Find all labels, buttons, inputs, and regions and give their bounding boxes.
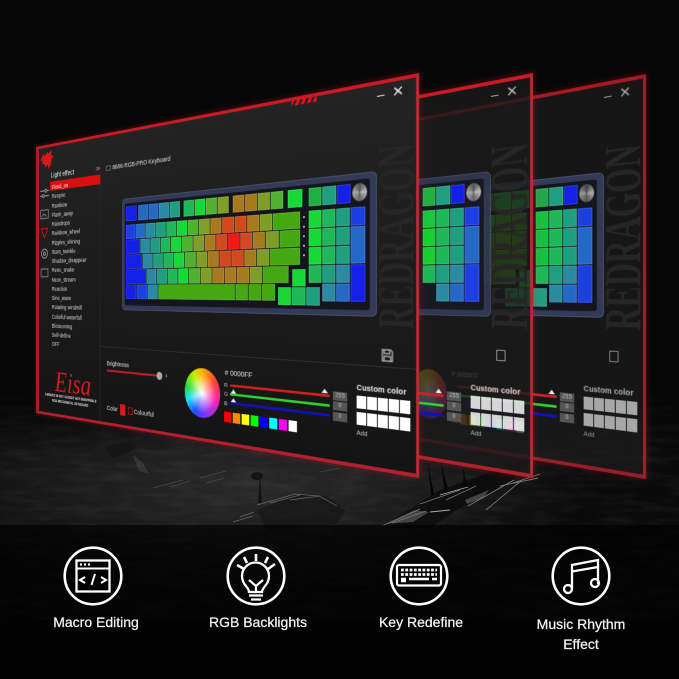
window controls: – ✕ bbox=[377, 83, 404, 103]
watermark: REDRAGON bbox=[367, 140, 426, 330]
effect list: Stars_twinkle bbox=[52, 247, 75, 255]
key row 4 bbox=[126, 266, 289, 284]
LED dots bbox=[303, 216, 305, 258]
border bbox=[263, 74, 646, 479]
slider R marker bbox=[321, 388, 328, 393]
knob bbox=[579, 183, 594, 203]
effect list: Blossoming bbox=[52, 322, 72, 330]
value B bbox=[333, 412, 347, 423]
selected effect bar bbox=[50, 175, 100, 191]
window border bbox=[36, 73, 419, 478]
eisa logo: Eisa bbox=[55, 366, 91, 403]
title bar marks bbox=[292, 95, 317, 106]
effect list: Respire bbox=[52, 192, 65, 200]
feature: macro editing icon bbox=[63, 546, 123, 606]
colourful label: Colourful bbox=[134, 408, 154, 418]
effect list: Neon_stream bbox=[52, 276, 76, 283]
custom grid bbox=[470, 395, 525, 432]
colourful checkbox bbox=[128, 407, 133, 415]
top right keys bbox=[536, 184, 578, 208]
brightness slider bbox=[107, 369, 159, 377]
rgb labels bbox=[224, 381, 228, 407]
watermark: REDRAGON bbox=[594, 141, 653, 331]
value boxes bbox=[560, 392, 574, 403]
window controls: – ✕ bbox=[604, 84, 631, 104]
knob bbox=[352, 182, 367, 202]
effect list: Fixed_on bbox=[52, 182, 68, 191]
icon: expand arrow: ≫ bbox=[95, 165, 101, 173]
effect list: OFF bbox=[52, 341, 60, 348]
custom color heading: Custom color bbox=[357, 383, 406, 397]
preset swatches bbox=[224, 411, 298, 432]
right key block bbox=[308, 206, 366, 302]
save icon bbox=[496, 350, 506, 361]
effect list: Sine_wave bbox=[52, 295, 71, 301]
feature label: music rhythm effect bbox=[537, 616, 625, 652]
effect list: Rotating windmill bbox=[52, 304, 82, 311]
eisa subtitle: RGB MECHANICAL KEYBOARD bbox=[52, 399, 88, 408]
feature label: music rhythm effect: Effect bbox=[563, 636, 599, 652]
add label: Add bbox=[357, 430, 368, 438]
color label: Color bbox=[107, 404, 118, 413]
right key block bbox=[536, 207, 593, 304]
function row: esc bbox=[126, 205, 137, 222]
icon: box bbox=[40, 268, 48, 278]
swatches bbox=[451, 414, 524, 434]
arrow keys bbox=[278, 287, 320, 306]
value G bbox=[333, 401, 347, 412]
value boxes: 255 bbox=[562, 393, 572, 401]
rgb labels: G bbox=[224, 390, 228, 398]
slider marker bbox=[548, 389, 555, 394]
effect list: Rainbow bbox=[52, 201, 67, 209]
media keys bbox=[308, 184, 351, 207]
right key block bbox=[422, 206, 480, 302]
border bbox=[150, 73, 533, 478]
rgb labels: R bbox=[224, 381, 228, 389]
effect list: Ripples_shining bbox=[52, 238, 80, 246]
watermark: REDRAGON bbox=[481, 140, 540, 330]
add: Add bbox=[471, 430, 482, 438]
slider R bbox=[230, 384, 330, 397]
keyboard inner bbox=[125, 178, 370, 310]
panel: back software window 3: 0 bbox=[565, 404, 569, 410]
key row 3 bbox=[126, 247, 300, 270]
save icon bbox=[609, 351, 619, 362]
window controls: – ✕ bbox=[491, 83, 518, 103]
icon: gear bbox=[41, 248, 48, 259]
feature label: key redefine: Key Redefine bbox=[379, 614, 463, 630]
keyboard plate bbox=[349, 172, 604, 318]
key row 2 bbox=[126, 229, 300, 254]
slider B marker bbox=[231, 398, 236, 403]
panel: main software window bbox=[36, 73, 419, 478]
feature: music rhythm icon bbox=[551, 546, 611, 606]
slider G marker bbox=[231, 389, 236, 394]
slider marker bbox=[435, 388, 442, 393]
brightness value: 4 bbox=[165, 374, 167, 379]
faint main keys bbox=[490, 190, 530, 211]
effect list bbox=[52, 182, 87, 348]
icon: redragon logo bbox=[40, 150, 54, 169]
sliders bbox=[344, 384, 444, 397]
value B: 0 bbox=[338, 413, 342, 420]
custom grid bbox=[583, 396, 638, 433]
feature label: music rhythm effect: Music Rhythm bbox=[537, 616, 625, 632]
rgb labels: B bbox=[224, 399, 227, 407]
color wheel bbox=[185, 367, 220, 420]
feature: rgb backlights icon bbox=[226, 546, 286, 606]
keyboard plate bbox=[236, 171, 491, 317]
value R bbox=[333, 391, 347, 402]
icon: image bbox=[40, 209, 49, 220]
key row 1 bbox=[126, 211, 300, 240]
panel: back software window 3: 0 bbox=[565, 414, 569, 421]
function row: F9-F12 bbox=[232, 190, 284, 213]
panel: back software window 2 bbox=[150, 73, 533, 478]
value G: 0 bbox=[338, 403, 342, 409]
icon: keyboard small bbox=[106, 165, 111, 171]
brightness knob bbox=[157, 372, 162, 380]
sidebar divider bbox=[99, 158, 101, 424]
effect list: Raindrops bbox=[52, 219, 70, 227]
save icon bbox=[381, 348, 394, 363]
panel: back software window 2: 0 bbox=[452, 413, 456, 420]
color box bbox=[120, 404, 125, 416]
custom color grid bbox=[356, 395, 411, 432]
value boxes bbox=[447, 391, 461, 402]
brightness label: Brightness bbox=[107, 360, 129, 369]
feature label: rgb backlights: RGB Backlights bbox=[209, 614, 307, 630]
function row: extra key bbox=[288, 188, 302, 208]
top right keys bbox=[422, 184, 465, 207]
heading: light effect: Light effect bbox=[51, 168, 74, 180]
color wheel bbox=[412, 368, 447, 421]
arrow up key bbox=[292, 268, 306, 287]
effect list: Colorful waterfall bbox=[52, 313, 82, 321]
keyboard plate bbox=[122, 171, 377, 317]
slider G bbox=[230, 393, 330, 407]
effect list: Shadow_disappear bbox=[52, 256, 86, 264]
effect list: Retro_snake bbox=[52, 266, 74, 274]
slider B bbox=[230, 402, 330, 417]
key row 5 bbox=[126, 284, 276, 301]
hex value: # 0000FF bbox=[225, 369, 253, 380]
value R: 255 bbox=[335, 392, 345, 400]
keyboard title: 8686-RGB-PRO Keyboard bbox=[112, 155, 171, 171]
icon: sliders bbox=[40, 188, 49, 198]
panel: back software window 2: 0 bbox=[452, 403, 456, 409]
feature label: macro editing: Macro Editing bbox=[53, 614, 139, 630]
custom color: Custom color bbox=[471, 383, 520, 397]
eisa subtitle: 3-MODES 96 KEY GASKET HOT-SWAPPABLE bbox=[45, 393, 96, 404]
function row: F5-F8 bbox=[184, 196, 229, 217]
knob bbox=[466, 182, 481, 202]
feature: key redefine icon bbox=[389, 546, 449, 606]
effect list: Rainbow_wheel bbox=[52, 228, 80, 237]
sliders bbox=[457, 385, 557, 398]
hex: # 0000FF bbox=[452, 370, 478, 380]
value boxes: 255 bbox=[449, 392, 459, 400]
effect list: Self-define bbox=[52, 332, 71, 339]
icon: light bulb red bbox=[41, 228, 48, 238]
panel: back software window 3 bbox=[263, 74, 646, 479]
custom color: Custom color bbox=[584, 384, 633, 398]
effect list: Reaction bbox=[52, 285, 67, 292]
function row: F1-F4 bbox=[138, 200, 180, 220]
background: dark terrain with ships bbox=[0, 417, 679, 526]
effect list: Flash_away bbox=[52, 210, 73, 218]
add: Add bbox=[584, 431, 595, 439]
settings divider bbox=[100, 346, 419, 370]
